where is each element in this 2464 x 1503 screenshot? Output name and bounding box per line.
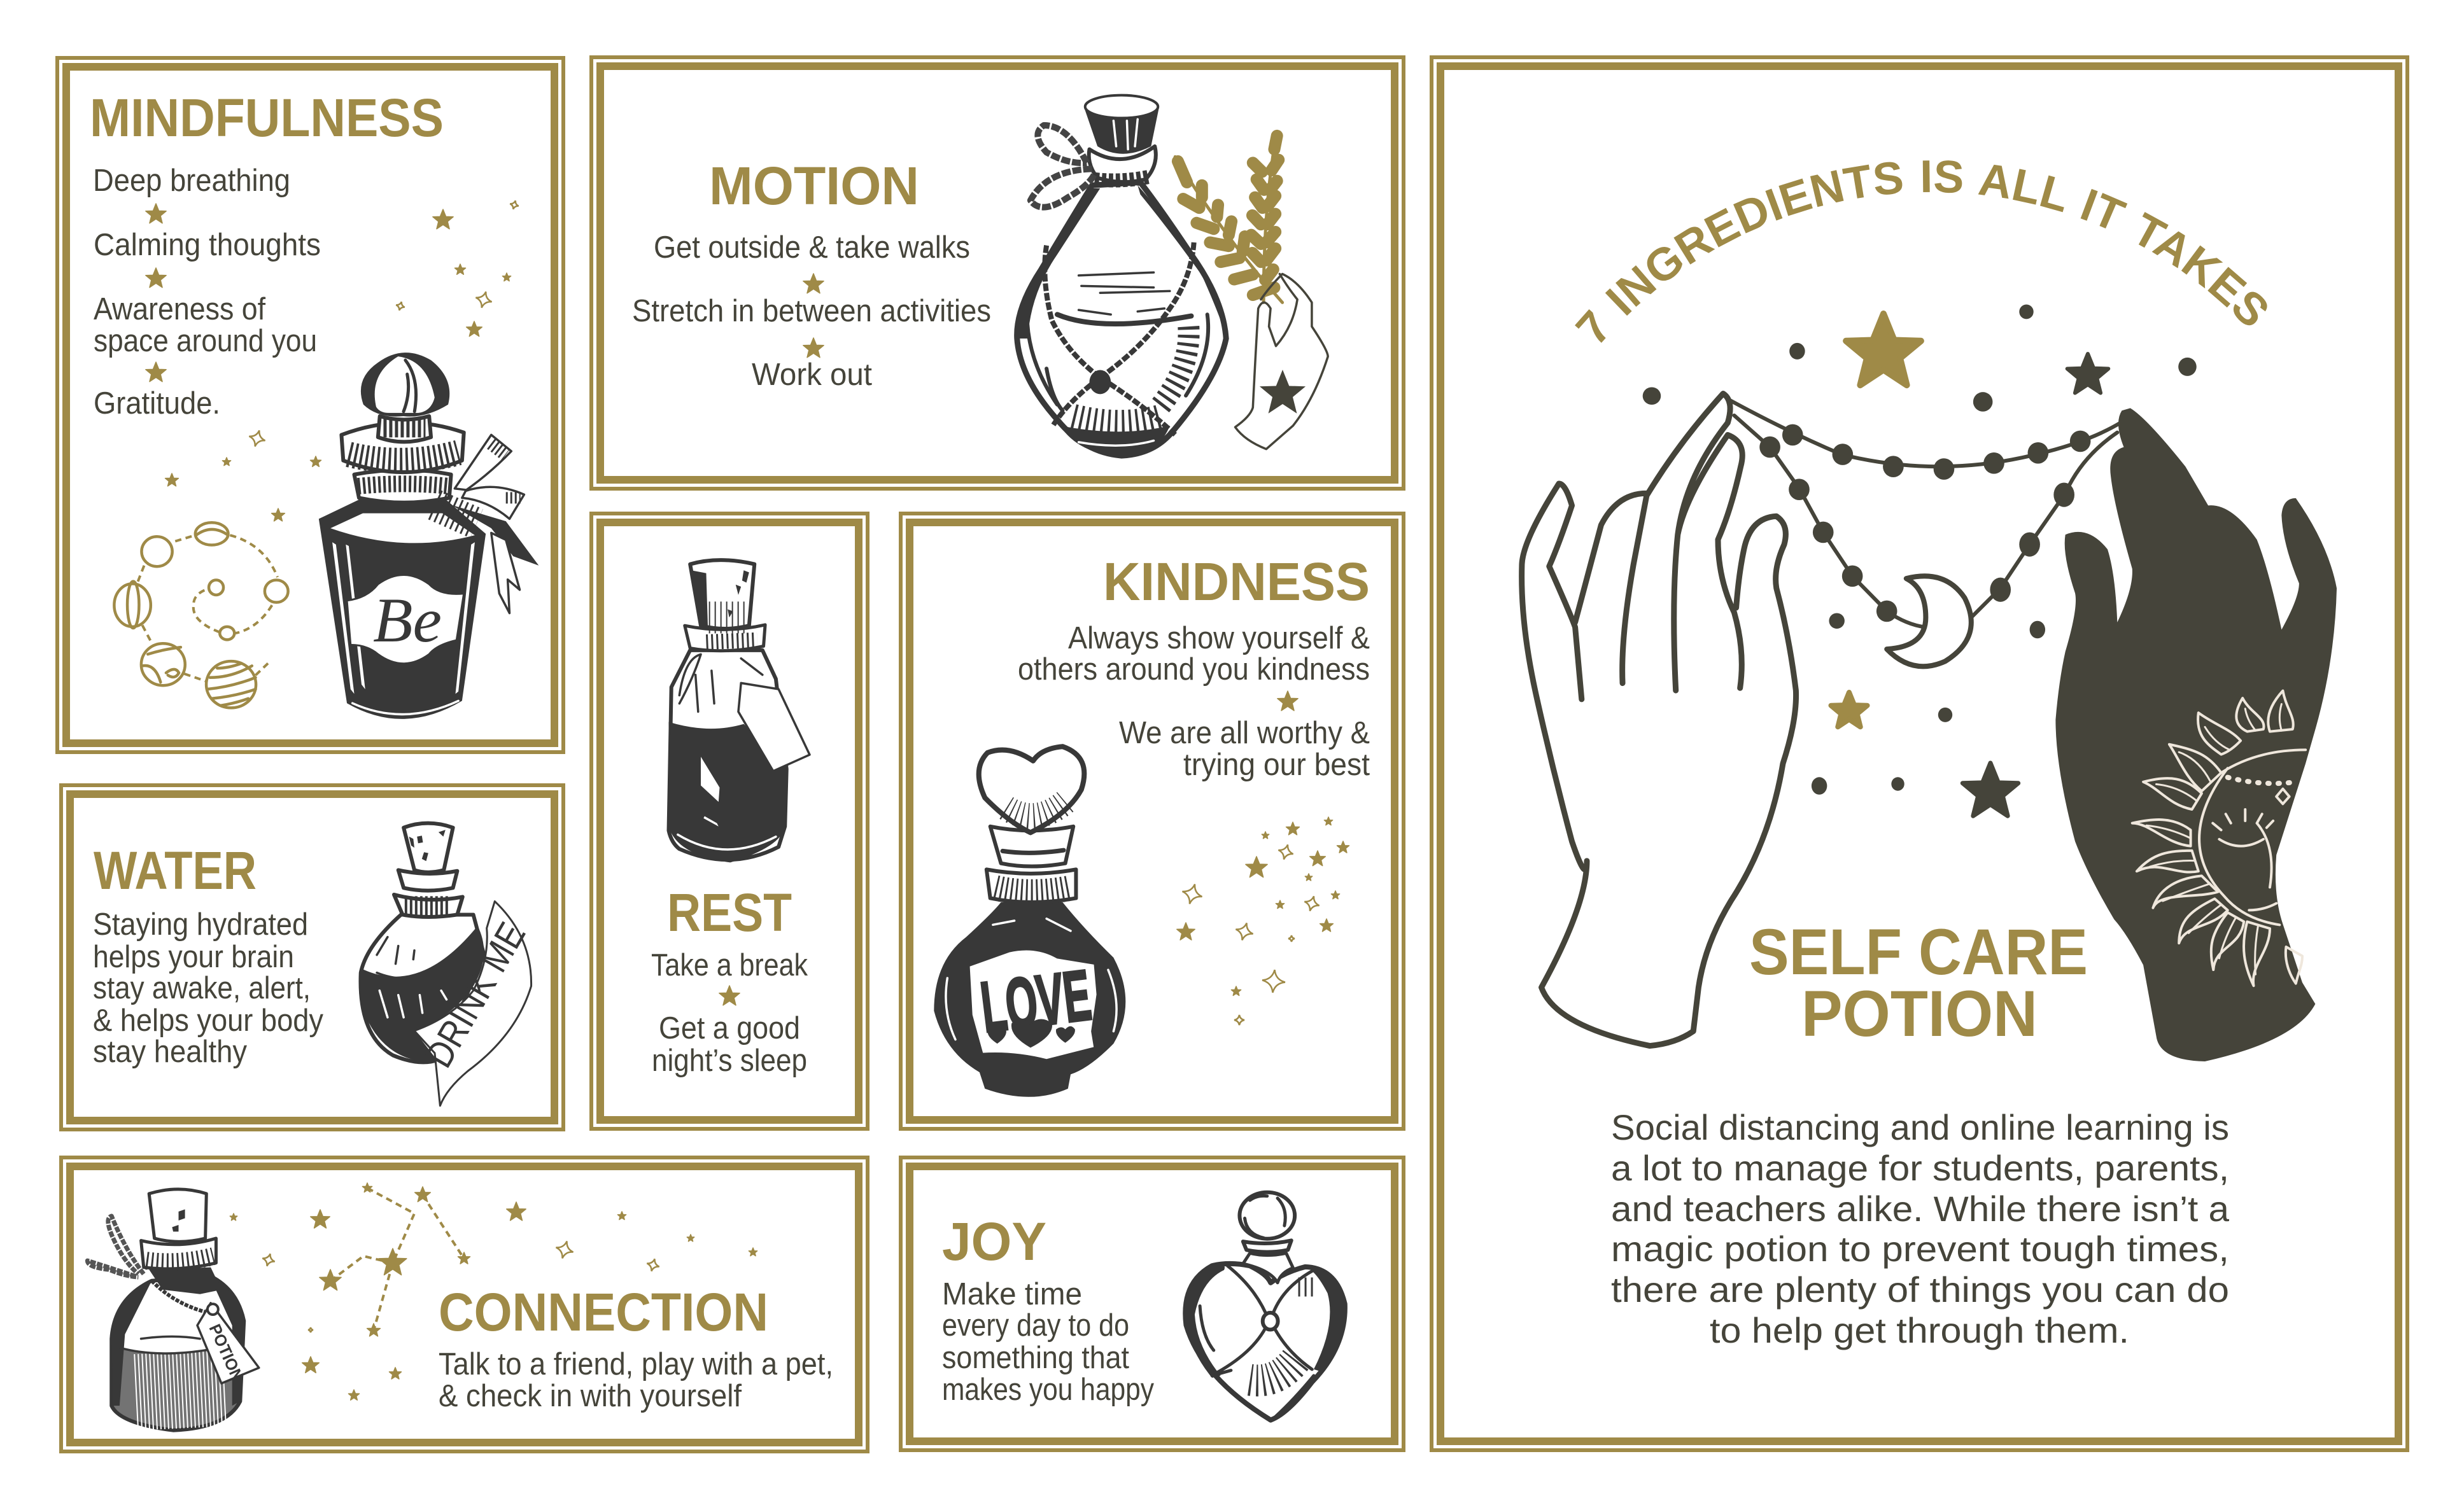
- text block: intro paragraph: magic potion to prevent tough times,: [1611, 1229, 2229, 1269]
- text block: kindness list: trying our best: [1183, 748, 1370, 782]
- text block: mindfulness list: Gratitude.: [94, 386, 220, 421]
- text block: kindness list: [1018, 621, 1370, 782]
- heading: motion: MOTION: [709, 156, 919, 216]
- text block: water: helps your brain: [93, 940, 294, 974]
- text block: rest list: [651, 948, 808, 1078]
- text block: connection: & check in with yourself: [439, 1379, 742, 1413]
- heading: self care potion: [1749, 916, 2088, 1050]
- heading: mindfulness: MINDFULNESS: [90, 88, 444, 148]
- label text: potion: POTION: [206, 1321, 248, 1384]
- text block: mindfulness list: Deep breathing: [93, 164, 290, 198]
- text block: water: stay healthy: [93, 1035, 247, 1069]
- stars: mindfulness: [165, 199, 520, 521]
- illustration: outlined left hand: [1522, 393, 1796, 1046]
- panel: rest: [591, 514, 868, 1129]
- text block: joy: every day to do: [942, 1308, 1129, 1343]
- label text: drink me: DRINK ME: [417, 915, 533, 1074]
- text block: joy: Make time: [942, 1277, 1082, 1311]
- heading: self care potion: SELF CARE: [1749, 916, 2088, 988]
- text block: water: [93, 907, 323, 1069]
- icon: gold laurel sprigs: [1175, 131, 1283, 302]
- panel: kindness: [901, 514, 1404, 1129]
- text block: kindness list: Always show yourself &: [1068, 621, 1370, 655]
- text block: motion list: [632, 230, 991, 392]
- icon: potion bottle with tag: [87, 1189, 259, 1431]
- text block: connection: Talk to a friend, play with a pet,: [439, 1347, 833, 1381]
- panel: mindfulness: [57, 58, 563, 752]
- text block: rest list: night’s sleep: [652, 1044, 807, 1078]
- text block: water: & helps your body: [93, 1003, 323, 1038]
- text block: mindfulness list: Calming thoughts: [94, 228, 321, 262]
- text block: rest list: Get a good: [659, 1011, 800, 1045]
- icon: necklace with crescent moon: [1731, 401, 2120, 666]
- panel: water: [61, 785, 563, 1129]
- icon: hand with star: [1236, 274, 1328, 449]
- icon: stars and dots: [1643, 304, 2197, 816]
- panel: connection: [61, 1157, 868, 1451]
- illustration: dark right hand with sun tattoo: [2055, 408, 2337, 1061]
- text block: motion list: Stretch in between activities: [632, 294, 991, 328]
- text block: connection: [439, 1347, 833, 1413]
- text block: intro paragraph: Social distancing and online learning is: [1611, 1107, 2229, 1147]
- text block: joy: [942, 1277, 1154, 1407]
- icon: drink me bottle: [360, 823, 533, 1106]
- label text: love: LOVE: [976, 955, 1095, 1047]
- text block: water: stay awake, alert,: [93, 971, 311, 1005]
- text block: kindness list: We are all worthy &: [1119, 716, 1370, 750]
- heading: water: WATER: [94, 841, 257, 900]
- constellation and stars: [230, 1183, 757, 1400]
- text block: intro paragraph: a lot to manage for students, parents,: [1611, 1148, 2229, 1188]
- label text: Be: Be: [373, 585, 442, 655]
- heading: self care potion: POTION: [1801, 977, 2038, 1050]
- panel: motion: [591, 57, 1404, 489]
- icon: love bottle with heart stopper: [934, 746, 1125, 1097]
- text block: mindfulness list: Awareness of: [94, 292, 265, 326]
- text block: joy: makes you happy: [942, 1373, 1154, 1407]
- icon: heart bottle: [1185, 1192, 1345, 1420]
- text block: intro paragraph: [1611, 1107, 2230, 1350]
- text block: intro paragraph: there are plenty of things you can do: [1611, 1269, 2229, 1310]
- panel: joy: [901, 1157, 1404, 1450]
- icon: corked bottle with tag: [669, 560, 810, 862]
- text block: mindfulness list: [93, 164, 321, 421]
- text block: kindness list: others around you kindness: [1018, 652, 1370, 687]
- icon: sun tattoo: [2132, 691, 2306, 986]
- text block: intro paragraph: and teachers alike. While there isn’t a: [1611, 1189, 2230, 1229]
- text block: joy: something that: [942, 1341, 1129, 1375]
- text block: intro paragraph: to help get through them.: [1710, 1310, 2129, 1350]
- heading: joy: JOY: [942, 1212, 1046, 1271]
- panel: self care potion: [1430, 55, 2409, 1452]
- icon: bottle labelled Be: [319, 353, 539, 719]
- stars: kindness: [1177, 817, 1349, 1025]
- curved heading: 7 INGREDIENTS IS ALL IT TAKES: [1575, 160, 2267, 343]
- heading: kindness: KINDNESS: [1103, 552, 1370, 612]
- text block: water: Staying hydrated: [93, 907, 308, 942]
- text block: mindfulness list: space around you: [94, 324, 317, 358]
- icon: rope bottle: [1017, 95, 1226, 456]
- icon: planets and orbit: [114, 522, 288, 708]
- heading: rest: REST: [667, 883, 792, 942]
- heading: connection: CONNECTION: [439, 1282, 768, 1342]
- text block: motion list: Work out: [752, 358, 872, 392]
- text block: rest list: Take a break: [651, 948, 808, 982]
- text block: motion list: Get outside & take walks: [654, 230, 970, 265]
